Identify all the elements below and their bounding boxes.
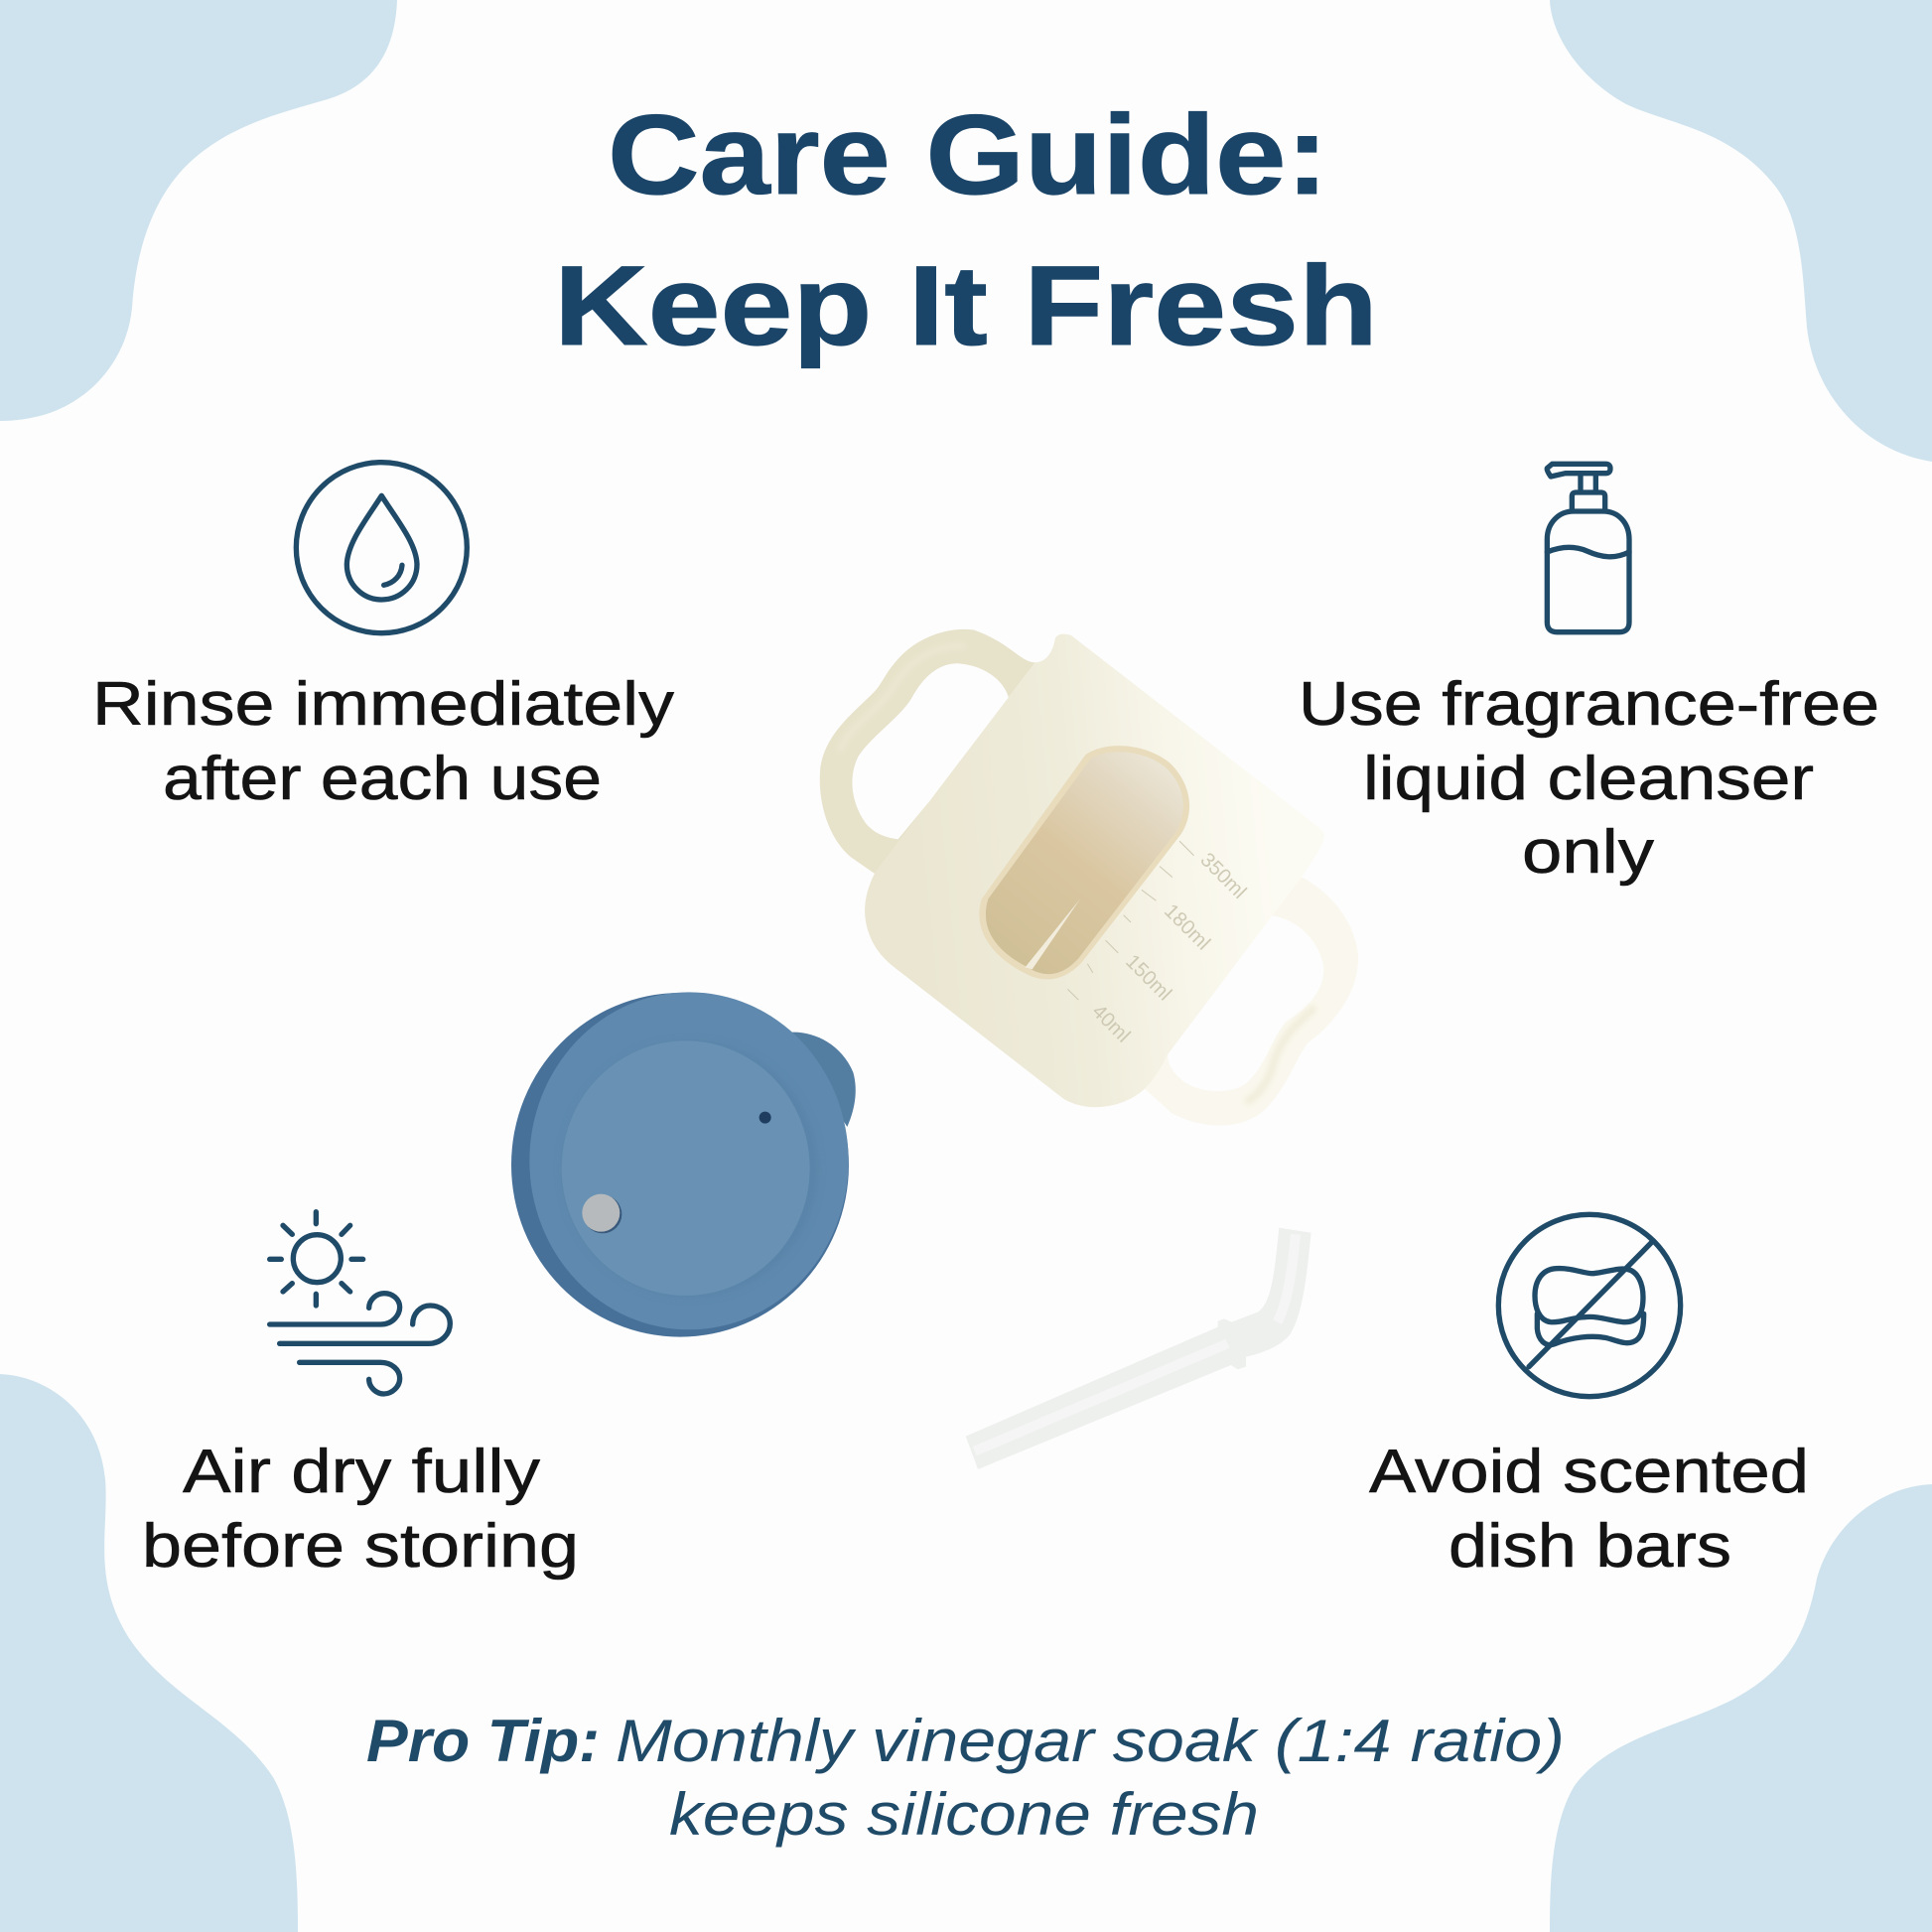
icon: sun and wind xyxy=(270,1212,450,1394)
text: cleanser: Use fragrance-free xyxy=(1299,670,1879,739)
text: air dry xyxy=(142,1438,579,1581)
lid rim xyxy=(529,992,849,1329)
text: air dry: Air dry fully xyxy=(183,1438,540,1506)
lid inner disc xyxy=(562,1040,810,1296)
title: Keep It Fresh xyxy=(554,243,1378,369)
corner blob: top left xyxy=(0,0,397,421)
text: cleanser: only xyxy=(1522,818,1654,887)
lid inner disc shadow xyxy=(562,1040,818,1298)
title: Care Guide: xyxy=(608,92,1328,218)
pro tip: Monthly vinegar soak (1:4 ratio) xyxy=(616,1708,1565,1774)
text: air dry: before storing xyxy=(142,1512,579,1581)
pro tip: Pro Tip: xyxy=(366,1708,600,1774)
text: avoid: dish bars xyxy=(1449,1512,1731,1581)
icon: soap pump bottle xyxy=(1547,464,1629,632)
product: silicone straw xyxy=(966,1228,1311,1469)
pro tip xyxy=(366,1708,1565,1848)
lid dark edge xyxy=(511,993,849,1337)
icon: water drop xyxy=(296,463,467,633)
text: rinse: after each use xyxy=(163,745,602,813)
cup window rim xyxy=(979,746,1189,979)
icon: no soap bar xyxy=(1498,1214,1681,1397)
lid tab xyxy=(787,1033,856,1127)
product: blue lid xyxy=(511,992,856,1337)
text: cleanser xyxy=(1299,670,1879,887)
text: avoid: Avoid scented xyxy=(1369,1438,1809,1506)
product: cream cup xyxy=(820,629,1358,1126)
measure marks: 180ml xyxy=(1160,900,1214,955)
corner blob: bottom right xyxy=(1550,1484,1932,1932)
measure marks xyxy=(1067,841,1250,1047)
text: avoid xyxy=(1369,1438,1809,1581)
text: rinse: Rinse immediately xyxy=(92,670,674,739)
text: cleanser: liquid cleanser xyxy=(1363,745,1814,813)
cup body xyxy=(865,634,1324,1107)
cup window xyxy=(986,752,1183,974)
window highlight xyxy=(1025,898,1080,969)
title xyxy=(554,92,1378,369)
straw hole xyxy=(582,1194,620,1232)
corner blob: top right xyxy=(1550,0,1932,462)
measure marks: 150ml xyxy=(1121,951,1175,1005)
small vent hole xyxy=(759,1112,771,1124)
pro tip: keeps silicone fresh xyxy=(669,1781,1259,1848)
text: rinse xyxy=(92,670,674,813)
right handle ridge xyxy=(1248,1009,1313,1101)
measure marks: 350ml xyxy=(1195,849,1250,903)
left handle ridge xyxy=(840,646,963,749)
measure marks: 40ml xyxy=(1087,1001,1134,1047)
corner blob: bottom left xyxy=(0,1374,298,1932)
cup right handle xyxy=(1140,876,1358,1126)
straw hole edge xyxy=(584,1195,621,1233)
cup left handle xyxy=(820,629,1035,874)
